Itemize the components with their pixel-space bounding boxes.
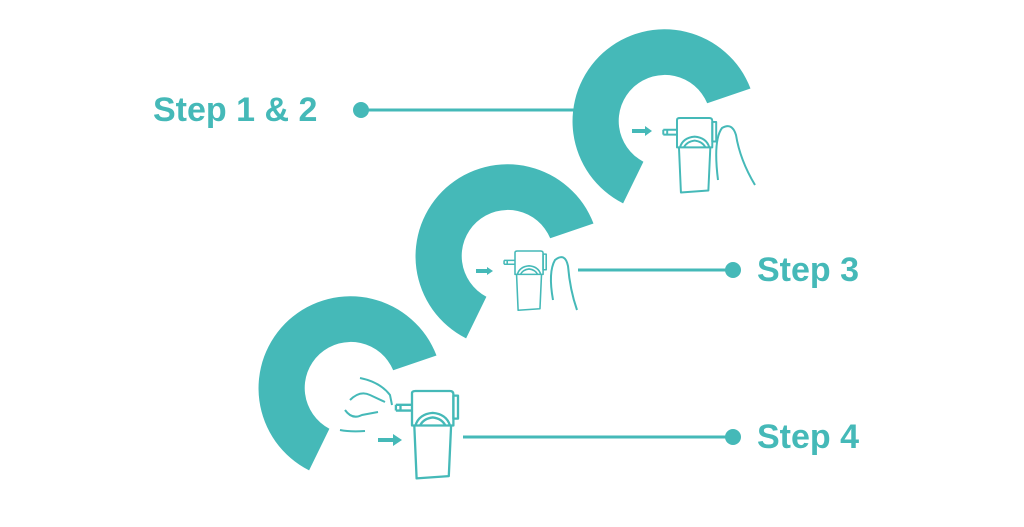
arc: step 3 [416, 164, 594, 338]
connector: step 1 & 2 [353, 102, 574, 118]
arc: step 4 [259, 296, 436, 470]
icon: device step 3 [476, 251, 577, 310]
label: step 3: Step 3 [757, 251, 859, 289]
connector: step 4 [463, 429, 741, 445]
label: step 1 & 2: Step 1 & 2 [153, 91, 317, 129]
label: step 4: Step 4 [757, 418, 859, 456]
icon: device step 4 [340, 378, 458, 478]
connector: step 3 [578, 262, 741, 278]
arc: step 1 & 2 [573, 29, 750, 203]
icon: device step 1 & 2 [632, 118, 755, 192]
